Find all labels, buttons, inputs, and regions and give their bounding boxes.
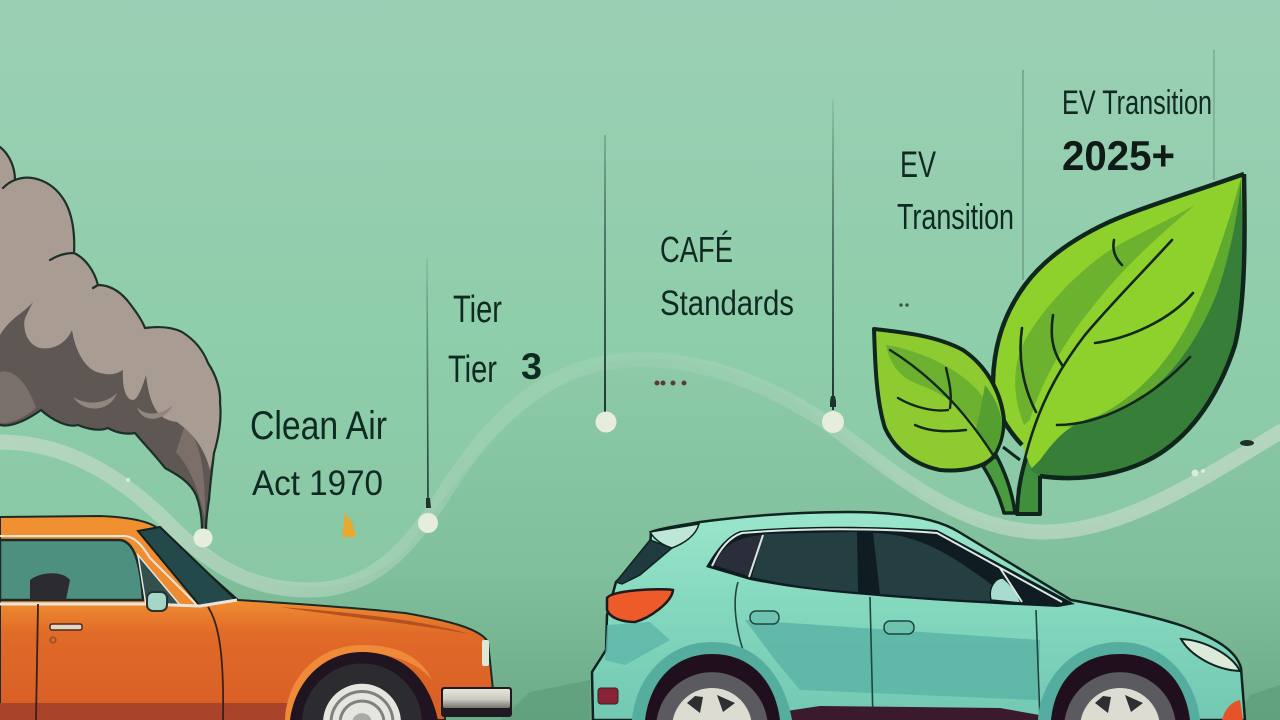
teal car door shading [745,620,1040,700]
label: Clean Air Act 1970 [250,404,387,503]
teal car front wheel [1065,672,1175,720]
teal car rear arch [645,654,780,720]
orange car hood highlight [280,607,470,634]
orange car door handle [50,624,82,643]
icon: green leaves [874,174,1245,514]
label: Tier 3: Tier [453,289,502,331]
orange car bumper [441,687,512,717]
teal car rear arch lip [632,642,792,720]
orange car window chrome [0,536,198,606]
orange car sill chrome [0,600,237,606]
teal car taillight [607,589,673,622]
orange car window [0,540,143,600]
teal car rear reflector [598,688,618,704]
label: EV Transition 2025+ [1062,84,1212,179]
label: EV Transition: EV [900,144,936,185]
orange car side mirror [147,592,167,611]
teal car front arch lip [1038,642,1200,720]
orange car headlight edge [482,640,489,666]
timeline node: CAFE [596,412,616,432]
smoke dark base [0,147,221,530]
smoke highlights [73,393,173,419]
smoke outline [0,147,221,530]
teal car handle front [884,621,914,634]
label: CAFE Standards [660,229,794,323]
label: Clean Air Act 1970: Clean Air [250,404,387,448]
smoke lower-left tone [0,371,36,423]
teal car door lines [735,582,1040,720]
timeline node: Tier 3 [418,513,438,533]
orange car windshield [138,527,236,606]
teal car rear shade [605,622,670,665]
teal car rear wheel [657,672,767,720]
node clasp [426,396,836,508]
icon: small orange mark [342,513,356,537]
orange car wheel arch lip [285,645,432,720]
teal car body [592,512,1245,720]
large leaf outline [993,174,1245,478]
timeline node: EV [822,411,844,433]
teal car rear window [616,540,672,584]
small leaf stem [983,455,1015,513]
background: lower field below the wave [0,358,1280,720]
teal car front side glass [752,532,858,592]
label: Tier 3 [448,289,542,391]
timeline stem: 2025 [1213,50,1215,180]
old orange car [0,516,512,720]
large leaf left shade [1015,205,1195,425]
smoke plume [0,147,221,530]
large leaf stem [1017,425,1060,514]
teal car driver glass [873,533,992,601]
small leaf veins [890,350,995,458]
orange car door lines [36,604,223,720]
teal car front arch [1051,654,1190,720]
large leaf dark shade [1030,180,1243,477]
orange car quarter glass [138,555,180,605]
orange car rear passenger silhouette [30,573,70,600]
teal car handle rear [750,611,779,624]
new teal car [592,512,1245,720]
orange car wheel arch [290,652,438,720]
timeline stem: Tier 3 [427,258,428,505]
label: Clean Air Act 1970: Act 1970 [252,464,383,503]
teal car front marker [1222,700,1243,720]
small marks [654,303,909,386]
orange car lower red band [0,703,300,720]
orange car body [0,516,493,720]
label: EV Transition 2025+: EV Transition [1062,84,1212,122]
timeline stem: EV Transition upper [1022,70,1024,280]
small leaf right tone [976,385,1002,454]
timeline wave ribbon [0,360,1280,590]
leaf connector [1003,447,1020,460]
timeline stem: CAFE Standards [604,135,606,412]
background: distant dark hills [500,680,1280,720]
label: EV Transition: Transition [897,196,1014,237]
teal car sill [780,706,1045,720]
teal car spoiler [650,524,699,548]
label: EV Transition [897,144,1014,237]
teal car headlight [1181,639,1240,671]
teal car A pillar chrome [1000,568,1022,602]
orange car tyre [302,663,422,720]
label: CAFE Standards: CAFÉ [660,229,733,270]
label: CAFE Standards: Standards [660,284,794,323]
label: Tier 3: 3 [521,346,542,387]
large leaf veins [1018,240,1193,490]
small leaf [874,329,1004,470]
timeline stem: EV Transition [832,100,834,410]
smoke tail tone [176,425,205,520]
teal car window chrome [712,529,1062,602]
timeline node: 1970 [194,528,212,548]
orange car hubcap [323,684,401,720]
small leaf shade [886,345,998,452]
large leaf mid shade [1060,178,1241,428]
teal car windows frame [706,527,1075,607]
smoke light lobes [0,147,220,470]
label: Tier 3: Tier [448,349,497,391]
label: EV Transition 2025+: 2025+ [1062,132,1175,179]
teal car rear side glass [714,535,762,576]
large leaf [993,174,1245,478]
wave speck marks [126,440,1254,482]
teal car side mirror [990,578,1021,603]
